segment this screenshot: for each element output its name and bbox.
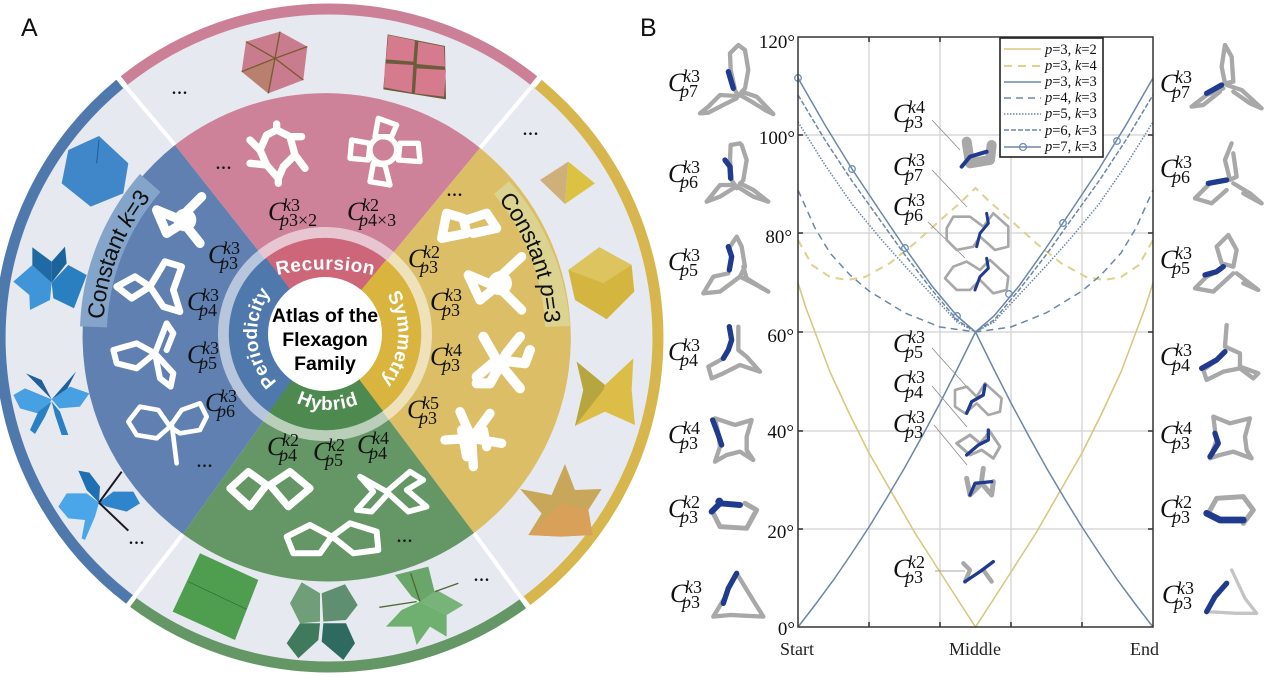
formula labels: panel A: C xyxy=(187,340,205,369)
y axis labels: 20° xyxy=(767,522,794,543)
center structure: p7 xyxy=(947,213,1008,250)
panel label B: B xyxy=(640,14,657,42)
formula labels: chart left column: p3 xyxy=(680,433,698,453)
curve: p=7 k=3 with markers xyxy=(795,75,1153,332)
formula labels: chart right column: k3 xyxy=(1175,152,1192,172)
ellipsis markers: ... xyxy=(172,81,188,98)
formula labels: chart left column: p7 xyxy=(680,81,698,101)
formula labels: chart left column: p3 xyxy=(682,592,700,612)
formula labels: panel A: k2 xyxy=(423,242,440,262)
right structure: p6 xyxy=(1195,143,1262,203)
formula labels: chart left column: k4 xyxy=(683,418,700,438)
formula labels: panel A: p6 xyxy=(217,401,235,421)
formula labels: panel A: p5 xyxy=(325,450,343,470)
x axis labels: Middle xyxy=(949,639,1001,659)
title: Atlas of the xyxy=(272,305,378,327)
formula labels: panel A: C xyxy=(187,287,205,316)
ellipsis markers: ... xyxy=(474,568,490,585)
heading: constant p=3: Constant p=3 xyxy=(502,194,560,322)
heading: constant k=3: Constant k=3 xyxy=(88,190,148,318)
formula labels: panel A: k3 xyxy=(445,285,462,305)
outer ring: symmetry xyxy=(527,84,658,601)
plot gridlines xyxy=(798,37,1153,627)
right structure: p3 k2 xyxy=(1207,497,1253,523)
formula labels: chart right column: k4 xyxy=(1175,418,1192,438)
y axis labels: 0° xyxy=(778,619,795,640)
formula labels: panel A: p3×2 xyxy=(280,210,317,230)
right structure: p7 xyxy=(1192,45,1262,108)
ellipsis markers: ... xyxy=(129,531,146,548)
formula labels: chart left column: p6 xyxy=(680,172,698,192)
formula labels: panel A xyxy=(187,195,462,470)
formula labels: panel A: C xyxy=(267,432,285,461)
formula labels: chart right column: p4 xyxy=(1172,355,1190,375)
formula labels: panel A: p3 xyxy=(220,253,238,273)
curve: p=6 k=3 xyxy=(798,95,1153,332)
formula labels: panel A: p3 xyxy=(442,300,460,320)
formula labels: chart left column: k2 xyxy=(683,492,700,512)
formula labels: chart right column: p3 xyxy=(1174,593,1192,613)
formula labels: chart center column: k4 xyxy=(908,97,925,117)
linkage: p4x3 xyxy=(350,118,420,185)
panel A: circular atlas xyxy=(0,4,664,672)
ellipsis markers: ... xyxy=(447,183,464,200)
inner band: symmetry xyxy=(325,260,421,411)
formula labels: chart right column: p3 xyxy=(1172,507,1190,527)
formula labels: panel A: k3 xyxy=(223,238,240,258)
formula labels: chart left column: p3 xyxy=(680,507,698,527)
y axis labels: 80° xyxy=(765,227,792,248)
left structure: p7 xyxy=(700,45,773,114)
sector: hybrid xyxy=(183,335,474,582)
formula labels: panel A: C xyxy=(430,342,448,371)
formula labels: chart center column: C xyxy=(893,369,911,398)
formula labels: chart center column xyxy=(893,97,925,587)
title: Family xyxy=(294,353,356,375)
formula labels: chart center column: k3 xyxy=(908,327,925,347)
formula labels: chart right column: k2 xyxy=(1175,492,1192,512)
origami: dark green hexagon xyxy=(287,582,358,660)
right structure: p3 k4 xyxy=(1210,417,1252,458)
outer grey disc xyxy=(4,13,654,663)
left structure: p4 xyxy=(708,327,760,378)
origami: gold hexagon xyxy=(568,247,634,319)
legend: p=4, k=3 xyxy=(1044,90,1097,106)
formula labels: chart center column: k3 xyxy=(908,407,925,427)
plot axes and ticks xyxy=(798,37,1153,627)
origami: gold star xyxy=(520,464,602,537)
legend: p=5, k=3 xyxy=(1044,106,1097,122)
formula labels: panel A: k3 xyxy=(220,386,237,406)
panel label A: A xyxy=(21,14,38,42)
formula labels: chart center column: C xyxy=(893,99,911,128)
formula labels: chart right column: C xyxy=(1160,245,1178,274)
formula labels: chart left column xyxy=(668,66,702,612)
formula labels: chart center column: p3 xyxy=(905,567,923,587)
formula labels: chart right column: p7 xyxy=(1172,82,1190,102)
formula labels: chart center column: C xyxy=(893,409,911,438)
center structure: p5 xyxy=(955,383,1002,415)
formula labels: chart center column: C xyxy=(893,329,911,358)
formula labels: panel A: p5 xyxy=(199,353,217,373)
formula labels: panel A: k3 xyxy=(283,195,300,215)
origami: blue star xyxy=(13,247,87,310)
formula labels: panel A: C xyxy=(268,197,286,226)
formula labels: chart center column: p3 xyxy=(905,422,923,442)
formula labels: chart left column: k3 xyxy=(683,335,700,355)
center structure: p4 xyxy=(957,430,1000,458)
formula labels: chart right column: k3 xyxy=(1175,243,1192,263)
y axis labels: 60° xyxy=(767,326,794,347)
formula labels: chart center column: p6 xyxy=(905,205,923,225)
legend: p=6, k=3 xyxy=(1044,123,1097,139)
right structure: p5 xyxy=(1195,235,1258,292)
center structure: p3 k3 xyxy=(967,468,993,495)
label: hybrid: Hybrid xyxy=(297,391,358,412)
ellipsis markers: ... xyxy=(216,156,232,173)
formula labels: chart right column: p5 xyxy=(1172,258,1190,278)
formula labels: chart right column xyxy=(1160,67,1194,613)
origami: gold four-point star xyxy=(575,358,635,426)
left structure: p6 xyxy=(707,143,768,202)
inner band: recursion xyxy=(266,238,386,334)
sector: periodicity xyxy=(83,145,325,534)
formula labels: panel A: k5 xyxy=(422,393,439,413)
formula labels: panel A: k4 xyxy=(445,340,462,360)
formula labels: chart right column: C xyxy=(1160,342,1178,371)
curve: p=3 k=3 xyxy=(798,332,1153,627)
linkage: blue p6 xyxy=(128,403,207,463)
curve: p=5 k=3 xyxy=(798,122,1153,332)
formula labels: chart left column: C xyxy=(668,159,686,188)
sector: recursion xyxy=(175,93,480,335)
formula labels: panel A: C xyxy=(408,244,426,273)
banner: constant k xyxy=(80,174,160,327)
center structure: p6 xyxy=(945,258,1008,293)
curve: p=4 k=3 xyxy=(798,190,1153,332)
left structure: p3 k2 xyxy=(712,498,757,528)
white dividers xyxy=(120,78,539,610)
formula labels: chart left column: k3 xyxy=(685,577,702,597)
formula labels: panel A: k2 xyxy=(328,435,345,455)
formula labels: panel A: k4 xyxy=(372,428,389,448)
linkage: blue p3 xyxy=(157,197,202,243)
formula labels: panel A: C xyxy=(347,197,365,226)
formula labels: chart right column: k3 xyxy=(1175,67,1192,87)
ellipsis markers: ... xyxy=(397,529,414,546)
x axis labels: Start xyxy=(780,639,814,659)
origami: blue hexagon xyxy=(62,136,128,207)
formula labels: chart left column: C xyxy=(668,494,686,523)
formula labels: chart left column: C xyxy=(668,420,686,449)
formula labels: chart left column: k3 xyxy=(683,157,700,177)
legend: p=3, k=2 xyxy=(1044,42,1097,58)
formula labels: chart center column: C xyxy=(893,192,911,221)
leader lines xyxy=(928,120,967,571)
linkage: gold k3 xyxy=(468,257,522,310)
left structure: p3 k4 xyxy=(713,418,753,462)
formula labels: chart left column: C xyxy=(670,579,688,608)
formula labels: chart left column: k3 xyxy=(683,245,700,265)
origami: gold pyramid xyxy=(540,162,595,204)
origami: green square xyxy=(173,553,258,640)
label: periodicity: Periodicity xyxy=(243,287,276,390)
ellipsis markers: ... xyxy=(523,122,540,139)
center circle xyxy=(268,277,382,391)
formula labels: chart right column: C xyxy=(1160,154,1178,183)
formula labels: panel A: k3 xyxy=(202,338,219,358)
banner: constant p xyxy=(494,181,570,327)
curve: p=3 k=2 xyxy=(798,283,1153,627)
inner band: periodicity xyxy=(229,258,325,412)
formula labels: chart center column: k3 xyxy=(908,150,925,170)
formula labels: chart right column: C xyxy=(1160,494,1178,523)
formula labels: panel A: C xyxy=(357,430,375,459)
linkage: p3x2 xyxy=(250,124,305,183)
formula labels: chart left column: k3 xyxy=(683,66,700,86)
inner band: hybrid xyxy=(269,334,383,430)
legend: p=3, k=3 xyxy=(1044,74,1097,90)
x axis labels: End xyxy=(1130,639,1159,659)
formula labels: panel A: k2 xyxy=(362,195,379,215)
linkage: green p4 k4 xyxy=(357,472,427,512)
outer ring: recursion xyxy=(124,9,534,81)
formula labels: chart center column: C xyxy=(893,152,911,181)
linkage: blue p4 xyxy=(117,262,182,312)
formula labels: panel A: k3 xyxy=(202,285,219,305)
formula labels: chart left column: C xyxy=(668,68,686,97)
linkage: gold k4 xyxy=(477,337,530,388)
formula labels: panel A: p4×3 xyxy=(359,210,396,230)
label: symmetry: Symmetry xyxy=(382,291,409,387)
formula labels: chart left column: C xyxy=(668,247,686,276)
formula labels: chart left column: C xyxy=(668,337,686,366)
formula labels: chart center column: p7 xyxy=(905,165,923,185)
formula labels: chart right column: C xyxy=(1160,420,1178,449)
legend xyxy=(1000,38,1103,157)
center structure: p3 k4 xyxy=(962,142,992,167)
y axis labels: 40° xyxy=(767,422,794,443)
formula labels: chart center column: k3 xyxy=(908,367,925,387)
outer ring: periodicity xyxy=(0,84,130,600)
origami: pink hexagon xyxy=(242,32,307,93)
origami: blue pinwheel xyxy=(58,471,140,540)
formula labels: panel A: C xyxy=(208,240,226,269)
left structure: p3 k3 xyxy=(713,573,763,617)
origami: pink squares xyxy=(383,34,446,99)
formula labels: chart left column: p5 xyxy=(680,260,698,280)
formula labels: chart center column: p5 xyxy=(905,342,923,362)
curve: p=3 k=4 xyxy=(798,188,1153,280)
label: recursion: Recursion xyxy=(276,256,374,275)
formula labels: chart left column: p4 xyxy=(680,350,698,370)
legend: p=7, k=3 xyxy=(1044,139,1097,155)
linkage: blue p5 xyxy=(113,323,173,387)
formula labels: chart center column: k3 xyxy=(908,190,925,210)
ellipsis markers: ... xyxy=(197,454,214,471)
panel B: angle chart xyxy=(668,32,1262,659)
formula labels: panel A: p3 xyxy=(419,408,437,428)
formula labels: chart center column: p3 xyxy=(905,112,923,132)
formula labels: panel A: k2 xyxy=(282,430,299,450)
formula labels: panel A: p4 xyxy=(279,445,297,465)
formula labels: chart right column: k3 xyxy=(1175,340,1192,360)
linkage: gold k5 xyxy=(445,412,502,467)
formula labels: chart right column: C xyxy=(1160,69,1178,98)
ellipsis markers xyxy=(129,81,540,585)
origami: blue butterfly xyxy=(13,372,89,435)
linkage: green p5 k2 xyxy=(287,523,378,553)
formula labels: chart right column: p3 xyxy=(1172,433,1190,453)
formula labels: panel A: C xyxy=(407,395,425,424)
formula labels: panel A: p3 xyxy=(442,355,460,375)
formula labels: panel A: C xyxy=(313,437,331,466)
left structure: p5 xyxy=(703,237,768,293)
origami: green star xyxy=(379,567,463,645)
formula labels: panel A: C xyxy=(205,388,223,417)
translucent inner ring xyxy=(224,232,426,436)
linkage: green p4 k2 xyxy=(230,472,310,507)
sector: symmetry xyxy=(325,148,571,533)
y axis labels: 120° xyxy=(759,32,795,53)
right structure: p4 xyxy=(1202,325,1258,380)
title: Flexagon xyxy=(282,329,368,351)
formula labels: chart right column: C xyxy=(1162,580,1180,609)
formula labels: chart center column: p4 xyxy=(905,382,923,402)
right structure: p3 k3 xyxy=(1207,570,1257,613)
legend: p=3, k=4 xyxy=(1044,58,1098,74)
outer ring: hybrid xyxy=(133,602,523,667)
formula labels: chart right column: k3 xyxy=(1177,578,1194,598)
formula labels: chart center column: C xyxy=(893,554,911,583)
formula labels: panel A: C xyxy=(430,287,448,316)
y axis labels: 100° xyxy=(759,128,795,149)
center structure: p3 k2 xyxy=(963,562,993,582)
y axis labels xyxy=(759,32,795,640)
formula labels: panel A: p3 xyxy=(420,257,438,277)
linkage: gold k2 xyxy=(442,213,497,238)
x axis labels xyxy=(780,639,1159,659)
formula labels: chart center column: k2 xyxy=(908,552,925,572)
formula labels: panel A: p4 xyxy=(369,443,387,463)
formula labels: chart right column: p6 xyxy=(1172,167,1190,187)
formula labels: panel A: p4 xyxy=(199,300,217,320)
